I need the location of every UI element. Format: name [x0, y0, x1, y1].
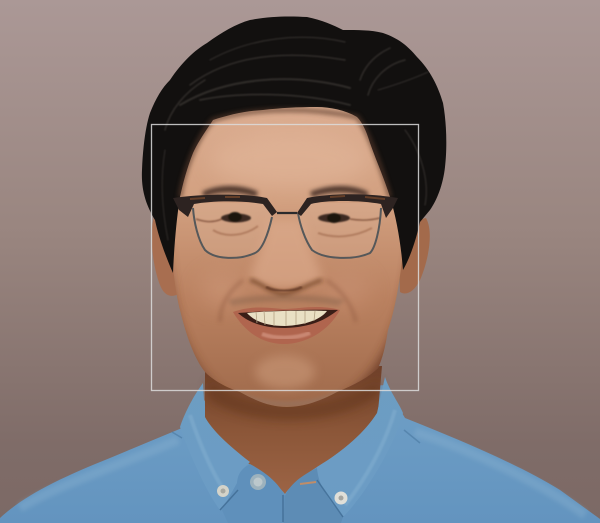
- face shading: [174, 142, 396, 406]
- smile lines and stubble: [220, 280, 356, 322]
- ears: [152, 215, 430, 296]
- eyebrows: [202, 186, 368, 197]
- eyes: [196, 212, 380, 236]
- collar: [180, 377, 403, 523]
- white square face frame: [152, 124, 418, 390]
- mouth: [233, 307, 340, 344]
- hair highlights: [162, 37, 428, 240]
- neck: [205, 366, 382, 494]
- shirt buttons: [217, 474, 348, 504]
- shirt body: [0, 385, 600, 523]
- nose: [250, 220, 322, 294]
- glasses: [173, 194, 398, 258]
- face: [169, 100, 407, 407]
- lens skin tone: [193, 203, 380, 258]
- hairline softening: [180, 110, 390, 197]
- hair: [142, 16, 446, 273]
